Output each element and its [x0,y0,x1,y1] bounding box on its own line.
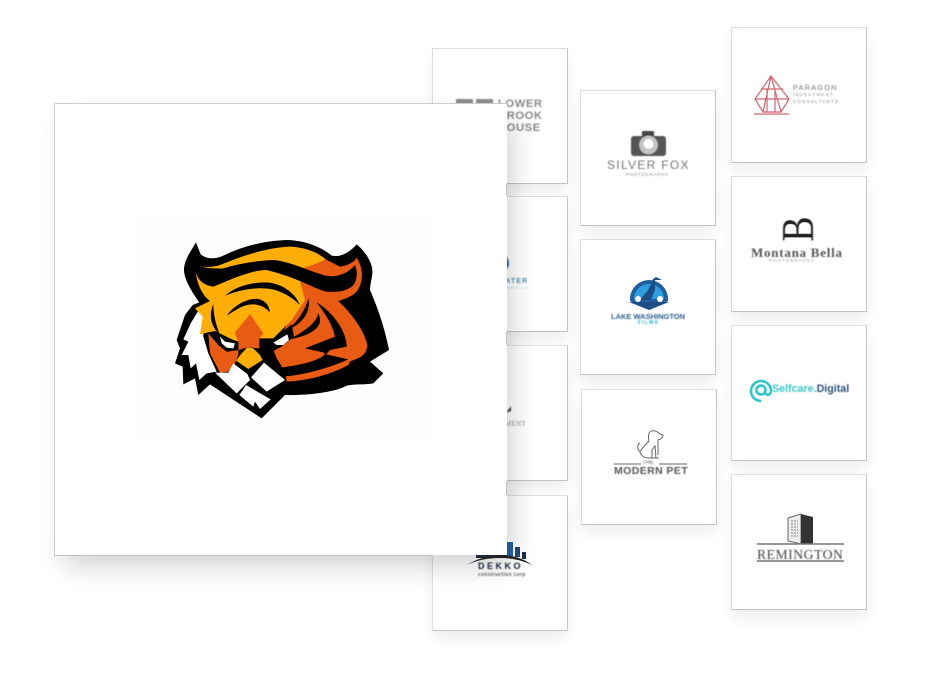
logo text: tagline: PHOTOGRAPHY CO [483,285,528,290]
forehead third stripe [227,299,270,316]
black silhouette [175,240,389,418]
yellow nose [236,347,263,369]
logo text: The: THE [642,460,654,466]
icon: rotated B: B [772,216,823,242]
card: Deepwater logo [432,196,568,332]
logo text: Dekko: DEKKO [478,561,523,571]
panel: main featured logo card [54,103,507,555]
yellow forehead and ear [195,247,326,343]
logo text: Modern Pet: MODERN PET [614,465,688,477]
logo text: Lower Brook House [498,98,543,134]
orange left cheek [208,333,238,373]
left eye [208,332,238,352]
forehead top stripe [195,260,357,292]
card: Silver Fox logo [580,90,716,226]
card: Lower Brook House logo [432,48,568,184]
divider lines [757,543,844,562]
card: Dekko Construction background [432,495,568,631]
orange right face [273,258,367,382]
cheek stripe middle [290,313,320,339]
cheek stripe upper [288,298,309,329]
white muzzle [215,363,250,393]
logo text: Lake Washington: LAKE WASHINGTON [611,312,685,321]
icon: heron emblem [629,277,669,310]
logo text: Investment: INVESTMENT [793,92,834,97]
card: Paragon logo [731,27,867,163]
card: The Modern Pet logo [581,389,717,525]
orange brow arrow [235,314,263,350]
logo: Dekko Construction [468,542,532,578]
logo text: Selfcare.Digital: Selfcare.Digital [772,383,849,395]
logo text: Silver Fox: SILVER FOX [607,158,690,172]
card: Montana Bella logo [731,176,867,312]
card: Retirement logo [432,345,568,481]
logo text: Consultants: CONSULTANTS [793,99,839,104]
icon: red gem [754,75,790,115]
logo text: Lower Brook House: LOWER [498,98,543,110]
logo text: Deepwater: BLUEWATER [475,278,528,285]
card: Lake Washington Films logo [580,239,716,375]
icon: at sign [750,380,772,402]
icon: skyline [468,542,532,565]
logo text: Retirement: RETIREMENT [479,420,526,428]
icon: tower building [788,513,813,545]
right eye [259,324,294,358]
logo text: Lower Brook House: HOUSE [498,122,541,134]
cheek stripe large [280,302,348,377]
icon: line-art dog [637,430,664,458]
logo text: Montana Bella: Montana Bella [751,245,843,260]
logo text: Photography: PHOTOGRAPHY [769,258,815,263]
logo text: Paragon: PARAGON [793,83,838,92]
left side stripe [211,304,220,335]
logo icon: blue drop [507,255,510,270]
logo text: construction corp: construction corp [478,572,526,578]
card: The Remington logo [731,474,867,610]
icon: tiger mascot logo [175,240,389,418]
logo text: Photography: PHOTOGRAPHY [626,172,669,177]
logo icon: dark mark [507,406,512,414]
card: Selfcare Digital logo [731,325,867,461]
logo text: Remington: REMINGTON [757,547,843,562]
white fur [182,311,217,380]
logo icon: grey bars [455,98,494,103]
logo text: Lower Brook House: BROOK [498,110,543,122]
forehead second stripe [225,282,300,305]
divider [614,464,687,465]
logo text: Films: FILMS [638,320,659,326]
icon: camera [630,130,667,157]
